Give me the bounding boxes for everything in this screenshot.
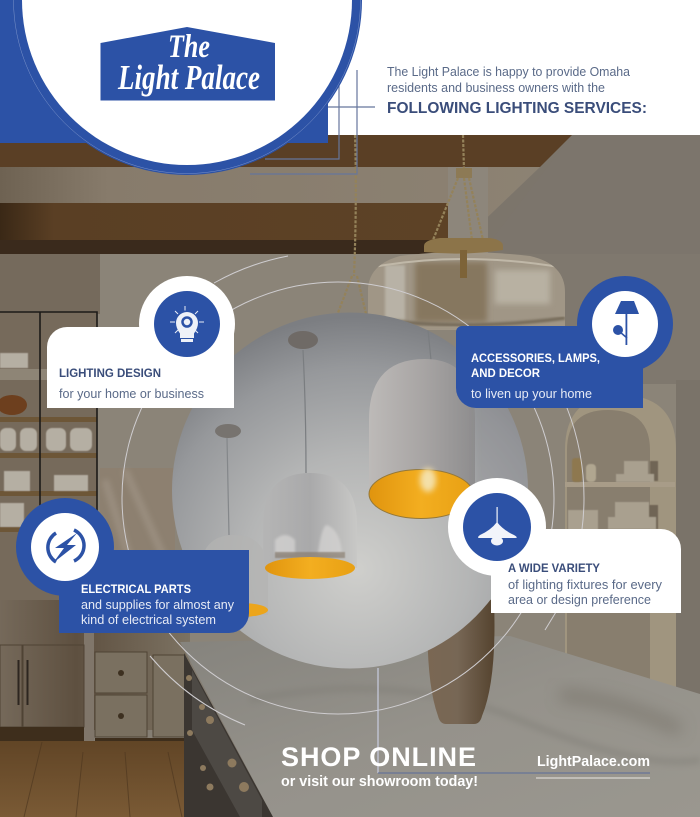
island base	[184, 653, 273, 817]
wood floor	[0, 741, 190, 817]
left lamp	[200, 424, 268, 617]
panel: accessories, lamps, and decor: ACCESSORIES, LAMPS,	[471, 353, 600, 365]
lower cabinets	[0, 600, 190, 730]
panel: accessories, lamps, and decor: to liven up your home	[471, 387, 592, 401]
panel: lighting design: LIGHTING DESIGN	[59, 368, 161, 380]
header white band	[0, 0, 700, 135]
logo: Light Palace	[117, 58, 260, 97]
connector line: shop online	[377, 668, 379, 773]
panel: a wide variety: A WIDE VARIETY	[508, 563, 600, 575]
vase	[427, 600, 494, 724]
panel: accessories, lamps, and decor	[456, 276, 673, 408]
header connector lines	[250, 70, 375, 174]
panel: electrical parts: kind of electrical system	[81, 613, 216, 627]
panel: a wide variety: of lighting fixtures for every	[508, 578, 663, 592]
icon: wall lamp	[613, 301, 639, 345]
blue header block	[0, 0, 328, 143]
panel: electrical parts	[16, 498, 249, 633]
intro heading: FOLLOWING LIGHTING SERVICES:	[387, 100, 647, 117]
middle lamp	[263, 331, 357, 579]
island marble countertop	[180, 636, 700, 817]
glass pendant	[368, 252, 565, 330]
shelving unit	[0, 312, 97, 602]
logo: The	[168, 29, 210, 65]
intro text: residents and business owners with the	[387, 81, 605, 95]
panel: electrical parts: ELECTRICAL PARTS	[81, 584, 191, 596]
panel: lighting design: for your home or business	[59, 387, 204, 401]
panel: a wide variety	[448, 478, 681, 613]
panel: accessories, lamps, and decor: AND DECOR	[471, 368, 541, 380]
call to action subline: or visit our showroom today!	[281, 774, 478, 790]
panel: lighting design	[47, 276, 235, 408]
call to action headline: SHOP ONLINE	[281, 742, 476, 772]
panel: a wide variety: area or design preference	[508, 593, 651, 607]
marble backsplash	[100, 468, 175, 568]
website link: LightPalace.com	[537, 753, 650, 770]
icon: light bulb with gear	[170, 306, 204, 342]
intro text: The Light Palace is happy to provide Omaha	[387, 65, 630, 79]
shop footer	[281, 742, 650, 790]
arched niche	[565, 395, 676, 700]
central photo: pendant lamps	[170, 310, 530, 670]
logo	[100, 27, 275, 100]
icon: hanging pendant lamp	[478, 507, 517, 546]
ceiling beams	[0, 135, 572, 167]
intro text	[387, 65, 647, 117]
right lamp	[369, 330, 475, 518]
logo circle	[12, 0, 362, 175]
decorative ring behind photo	[122, 256, 584, 725]
pendant chains	[336, 135, 483, 318]
panel: electrical parts: and supplies for almost any	[81, 598, 235, 612]
icon: lightning bolt in circular arrows	[48, 530, 84, 563]
